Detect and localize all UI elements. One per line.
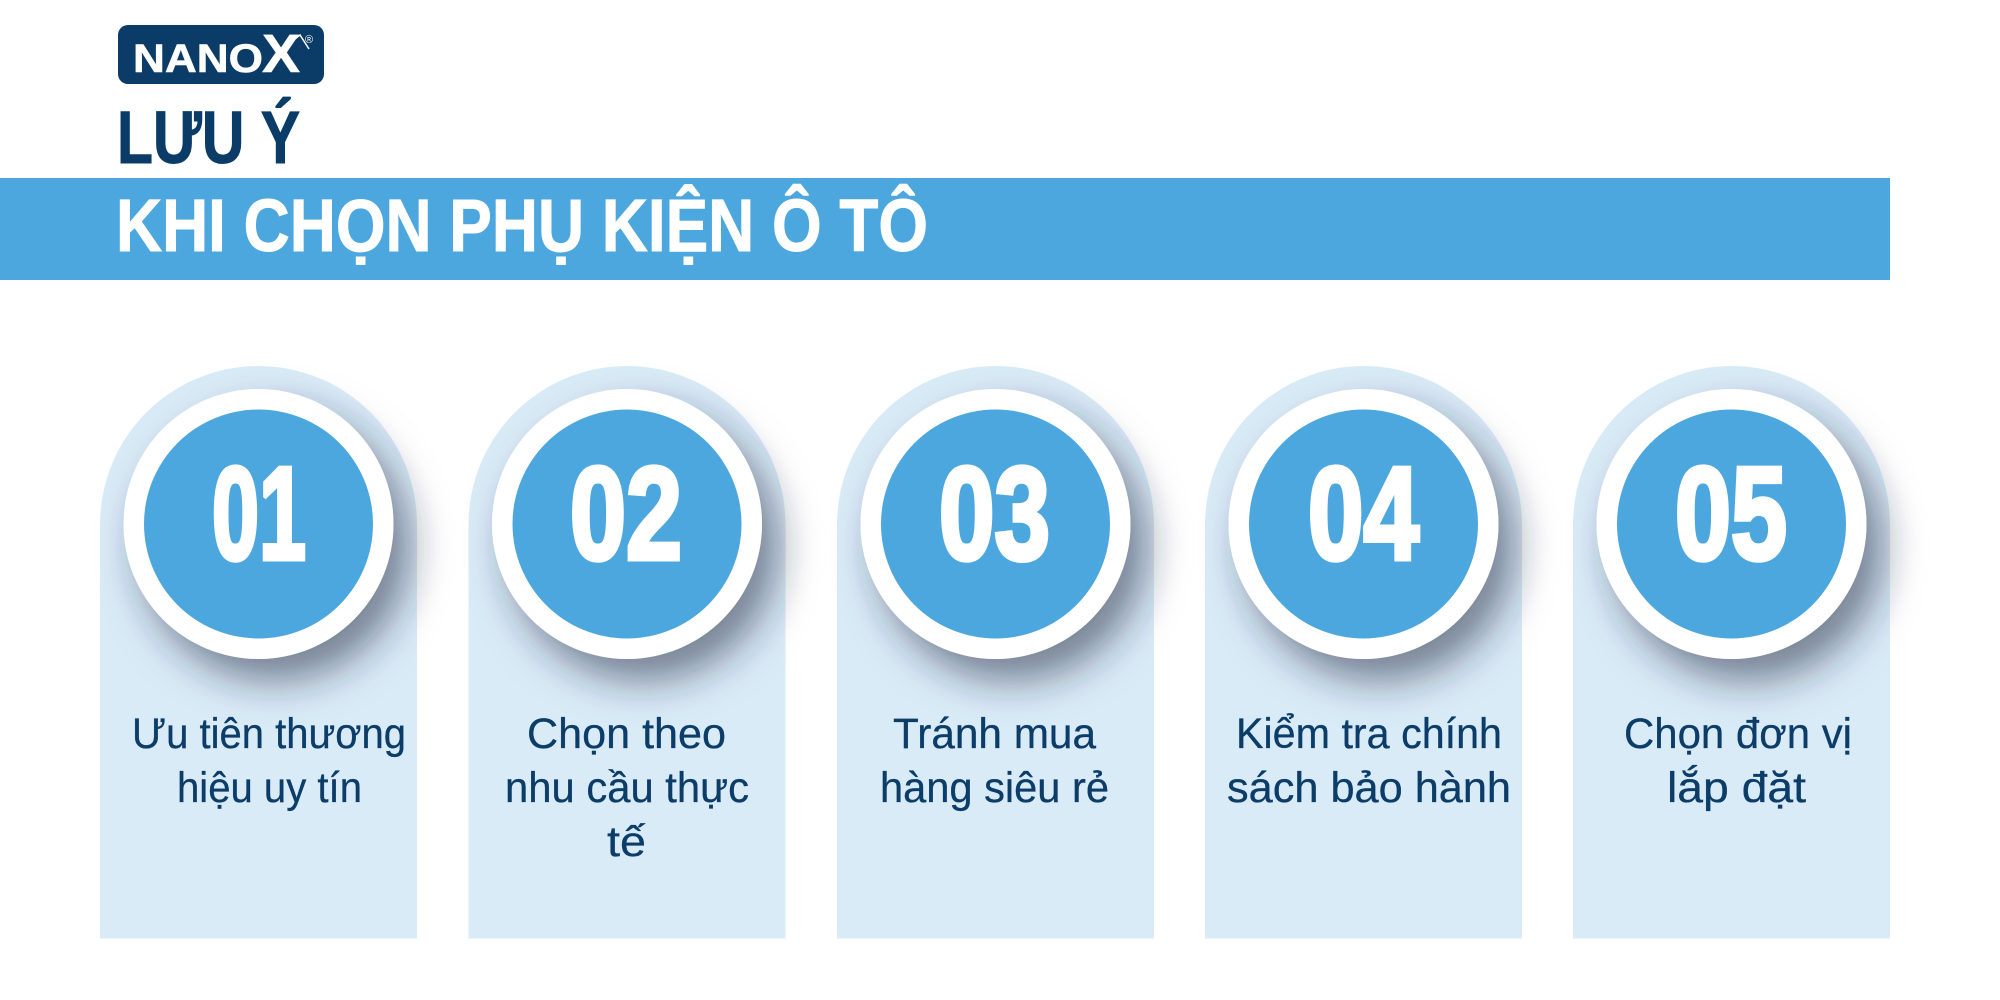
- panel: card 03: [837, 366, 1154, 938]
- panel: card 05: lắp đặt: [1667, 764, 1806, 812]
- heading: LƯU Ý: LƯU Ý: [117, 96, 300, 179]
- panel: card 04: Kiểm tra chính: [1236, 710, 1502, 758]
- panel: card 02: nhu cầu thực: [505, 764, 749, 812]
- panel: card 04: 04: [1308, 440, 1419, 587]
- panel: card 05: 05: [1675, 440, 1787, 587]
- panel: card 02: tế: [607, 818, 646, 866]
- panel: card 01: Ưu tiên thương: [132, 710, 406, 758]
- logo: NanoX: ®: [305, 34, 313, 46]
- panel: card 01: hiệu uy tín: [177, 764, 362, 812]
- panel: card 04: sách bảo hành: [1227, 764, 1511, 812]
- logo: NanoX: [118, 24, 324, 84]
- heading band: [0, 178, 1890, 280]
- logo: NanoX: NANO: [133, 37, 263, 81]
- panel: card 02: 02: [570, 440, 682, 587]
- panel: card 01: [100, 366, 417, 938]
- panel: card 03: 03: [939, 440, 1050, 587]
- panel: card 03: Tránh mua: [893, 710, 1096, 758]
- panel: card 03: hàng siêu rẻ: [880, 764, 1109, 812]
- logo: NanoX: X: [262, 24, 300, 84]
- panel: card 02: [468, 366, 786, 938]
- panel: card 01: 01: [212, 440, 306, 587]
- panel: card 02: Chọn theo: [527, 710, 726, 758]
- heading: KHI CHỌN PHỤ KIỆN Ô TÔ: KHI CHỌN PHỤ KIỆN Ô TÔ: [116, 184, 928, 267]
- panel: card 05: Chọn đơn vị: [1624, 710, 1852, 758]
- panel: card 05: [1573, 366, 1890, 938]
- panel: card 04: [1205, 366, 1522, 938]
